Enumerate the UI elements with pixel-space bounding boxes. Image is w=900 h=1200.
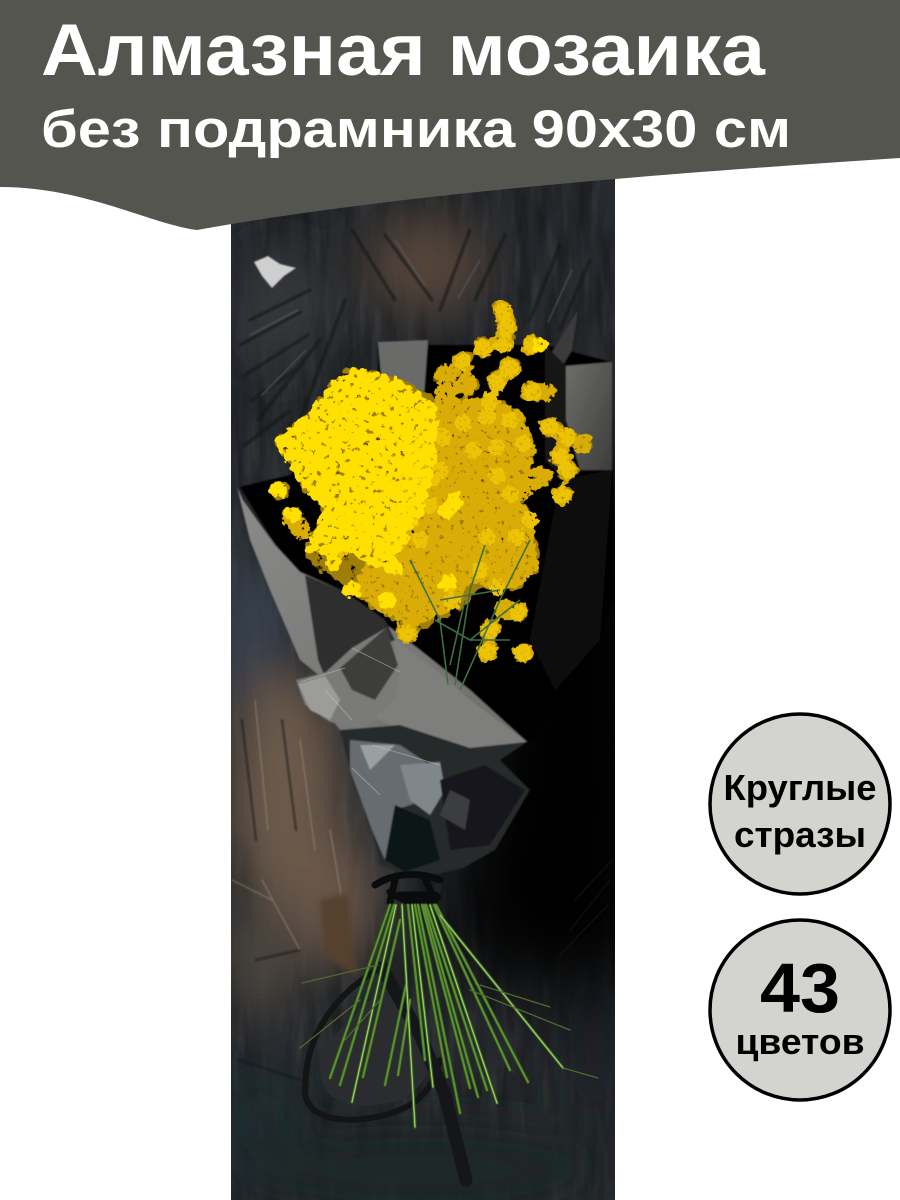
dark right side shadow [440, 480, 660, 1000]
badge: round rhinestones: стразы [734, 814, 866, 855]
badge: 43 colours: 43 [760, 949, 840, 1027]
title: Алмазная мозаика [41, 10, 767, 91]
thin stems in front of flowers [410, 540, 530, 690]
knot tie [375, 875, 440, 902]
picture panel: mimosa bouquet on dark canvas [231, 179, 615, 1200]
bouquet wrapping paper [237, 310, 615, 878]
badge: round rhinestones: Круглые [724, 767, 876, 808]
badge: round rhinestones [710, 714, 890, 894]
painted canvas background [231, 179, 615, 1200]
mimosa flowers [272, 310, 583, 653]
badge: 43 colours: цветов [736, 1021, 864, 1062]
gold flower layer [292, 310, 583, 653]
brush texture [231, 170, 615, 1200]
bright flower layer [272, 345, 540, 600]
header banner [0, 0, 900, 230]
crease highlights on crumpled paper [300, 648, 440, 795]
ribbon [305, 965, 466, 1180]
badge: 43 colours [710, 920, 890, 1100]
deep gold flower layer [272, 310, 583, 653]
mid-yellow flower layer [340, 312, 567, 653]
hand-drawn strokes [232, 230, 612, 1080]
subtitle: без подрамника 90х30 см [41, 100, 791, 159]
white paint splash [254, 256, 296, 288]
green stems [300, 905, 598, 1127]
